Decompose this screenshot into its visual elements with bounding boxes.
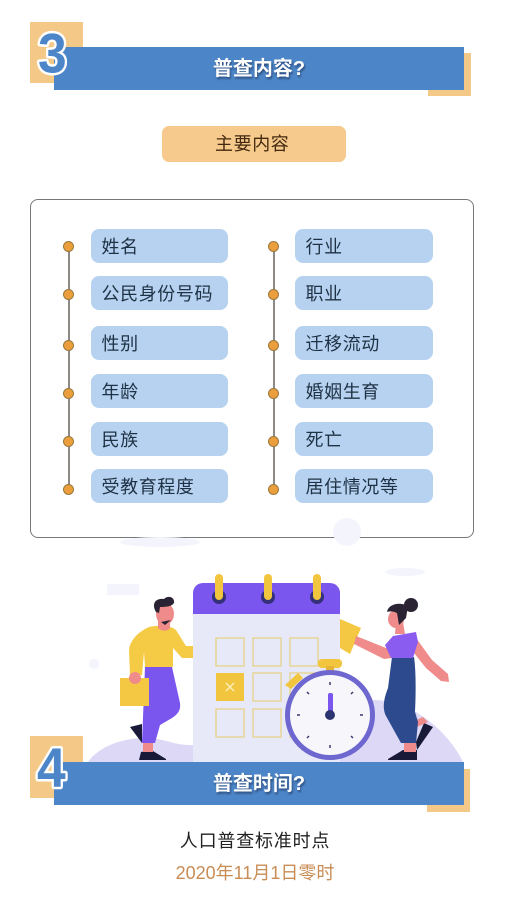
folder held by woman xyxy=(340,619,361,654)
header bar: 普查内容: 普查内容? xyxy=(213,58,305,80)
item: 婚姻生育 xyxy=(295,374,433,408)
item: 职业 xyxy=(295,276,433,310)
item: 行业 xyxy=(295,229,433,263)
item: 姓名 xyxy=(91,229,228,263)
item: 居住情况等 xyxy=(295,469,433,503)
number 3: 3 xyxy=(38,23,67,85)
item: 年龄 xyxy=(91,374,228,408)
item: 民族 xyxy=(91,422,228,456)
orange square behind number 3 xyxy=(30,22,83,83)
section 4 header xyxy=(30,736,470,812)
number 4: 4 xyxy=(37,737,66,799)
text: 人口普查标准时点: 人口普查标准时点 xyxy=(180,831,330,851)
man xyxy=(120,597,193,760)
subheading pill: 主要内容: 主要内容 xyxy=(215,134,289,154)
item: 行业: 行业 xyxy=(306,237,343,257)
item: 受教育程度: 受教育程度 xyxy=(102,477,194,497)
item: 姓名: 姓名 xyxy=(102,237,139,257)
item: 职业: 职业 xyxy=(306,284,343,304)
panel: main content list xyxy=(30,199,474,538)
item: 性别 xyxy=(91,326,228,360)
item: 迁移流动: 迁移流动 xyxy=(306,334,380,354)
item: 迁移流动 xyxy=(295,326,433,360)
item: 民族: 民族 xyxy=(102,430,139,450)
item: 死亡 xyxy=(295,422,433,456)
stopwatch xyxy=(285,659,372,758)
item: 婚姻生育: 婚姻生育 xyxy=(306,382,380,402)
item: 死亡: 死亡 xyxy=(306,430,343,450)
item: 公民身份号码: 公民身份号码 xyxy=(102,284,213,304)
header bar: 普查时间 xyxy=(54,762,464,805)
orange square behind number 4 xyxy=(30,736,83,798)
header bar: 普查内容 xyxy=(54,47,464,90)
left timeline xyxy=(63,241,74,495)
item: 性别: 性别 xyxy=(102,334,139,354)
section 3 header xyxy=(30,22,471,96)
item: 年龄: 年龄 xyxy=(102,382,139,402)
header bar: 普查时间: 普查时间? xyxy=(213,773,305,795)
woman xyxy=(354,598,449,760)
subheading pill: 主要内容 xyxy=(162,126,346,162)
right timeline xyxy=(268,241,279,495)
orange accent right xyxy=(427,769,470,812)
item: 受教育程度 xyxy=(91,469,228,503)
orange accent right xyxy=(428,53,471,96)
illustration: people and calendar xyxy=(88,518,463,762)
item: 公民身份号码 xyxy=(91,276,228,310)
calendar xyxy=(193,574,340,762)
background decorations xyxy=(89,518,425,669)
item: 居住情况等: 居住情况等 xyxy=(306,477,398,497)
text: 2020年11月1日零时: 2020年11月1日零时 xyxy=(176,863,334,883)
background hills xyxy=(88,700,463,762)
